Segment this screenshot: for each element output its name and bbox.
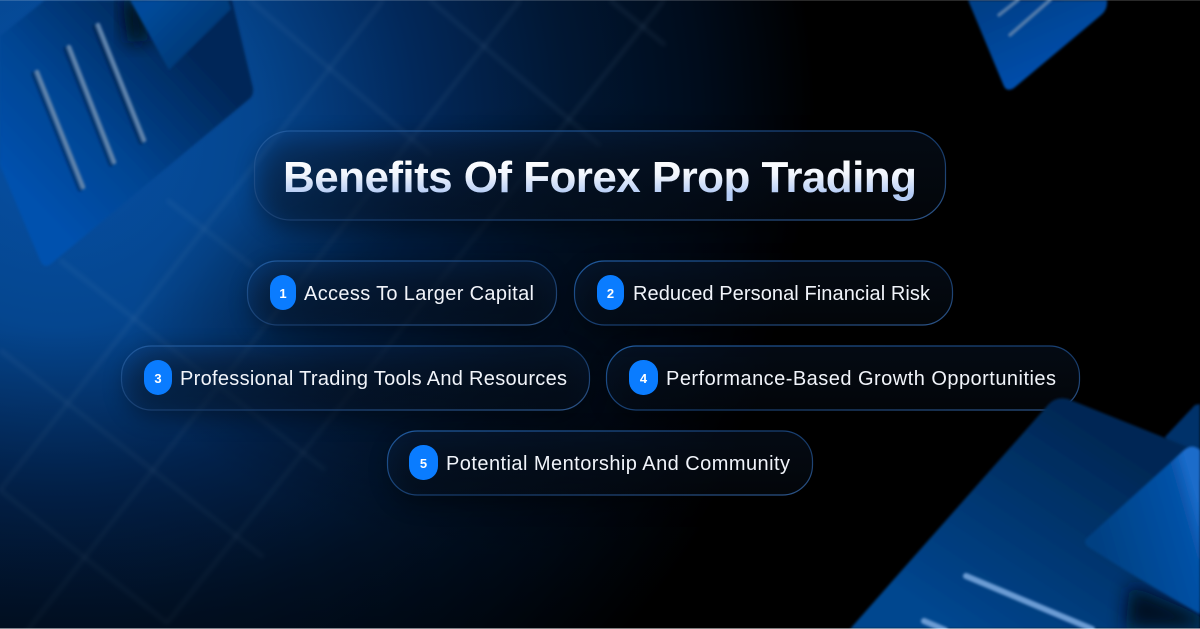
shape: bottom-right document <box>850 398 1200 629</box>
label 3: Professional Trading Tools And Resources <box>180 368 567 390</box>
benefit 3 <box>122 346 590 417</box>
pill background <box>388 431 812 495</box>
title shadow <box>258 140 942 228</box>
title pill <box>254 131 946 220</box>
pill background <box>606 346 1080 410</box>
fold triangle <box>130 0 231 70</box>
benefit 5 <box>388 431 812 502</box>
shape: top-right document <box>968 0 1107 90</box>
title text: Benefits Of Forex Prop Trading <box>283 153 917 202</box>
pill shadow <box>126 353 585 417</box>
benefit 4 <box>606 346 1080 417</box>
number 4: 4 <box>640 371 648 386</box>
badge 2 <box>597 275 624 310</box>
badge 4 <box>629 360 658 395</box>
shadow under fold <box>1125 585 1200 629</box>
lines on bottom-right document <box>924 576 1092 629</box>
number 5: 5 <box>420 456 427 471</box>
label 2: Reduced Personal Financial Risk <box>633 283 931 305</box>
lines on document <box>34 25 144 189</box>
number 2: 2 <box>607 286 614 301</box>
label 5: Potential Mentorship And Community <box>446 453 790 475</box>
pill background <box>122 346 590 410</box>
pill shadow <box>252 268 552 332</box>
badge 1 <box>270 275 296 310</box>
shape: top-left document <box>0 0 253 266</box>
number 1: 1 <box>279 286 287 301</box>
shadow behind fold <box>122 0 150 44</box>
benefit 1 <box>248 261 556 332</box>
number 3: 3 <box>154 371 162 386</box>
badge 5 <box>409 445 438 480</box>
fold triangle <box>1085 446 1200 614</box>
title <box>254 131 946 228</box>
benefit 2 <box>574 261 952 332</box>
pill shadow <box>392 438 808 502</box>
label 4: Performance-Based Growth Opportunities <box>666 368 1056 390</box>
pill background <box>574 261 952 325</box>
pill shadow <box>579 268 948 332</box>
lines on top-right document <box>999 0 1050 35</box>
badge 3 <box>144 360 172 395</box>
pill background <box>248 261 556 325</box>
pill shadow <box>611 353 1075 417</box>
label 1: Access To Larger Capital <box>304 283 534 305</box>
